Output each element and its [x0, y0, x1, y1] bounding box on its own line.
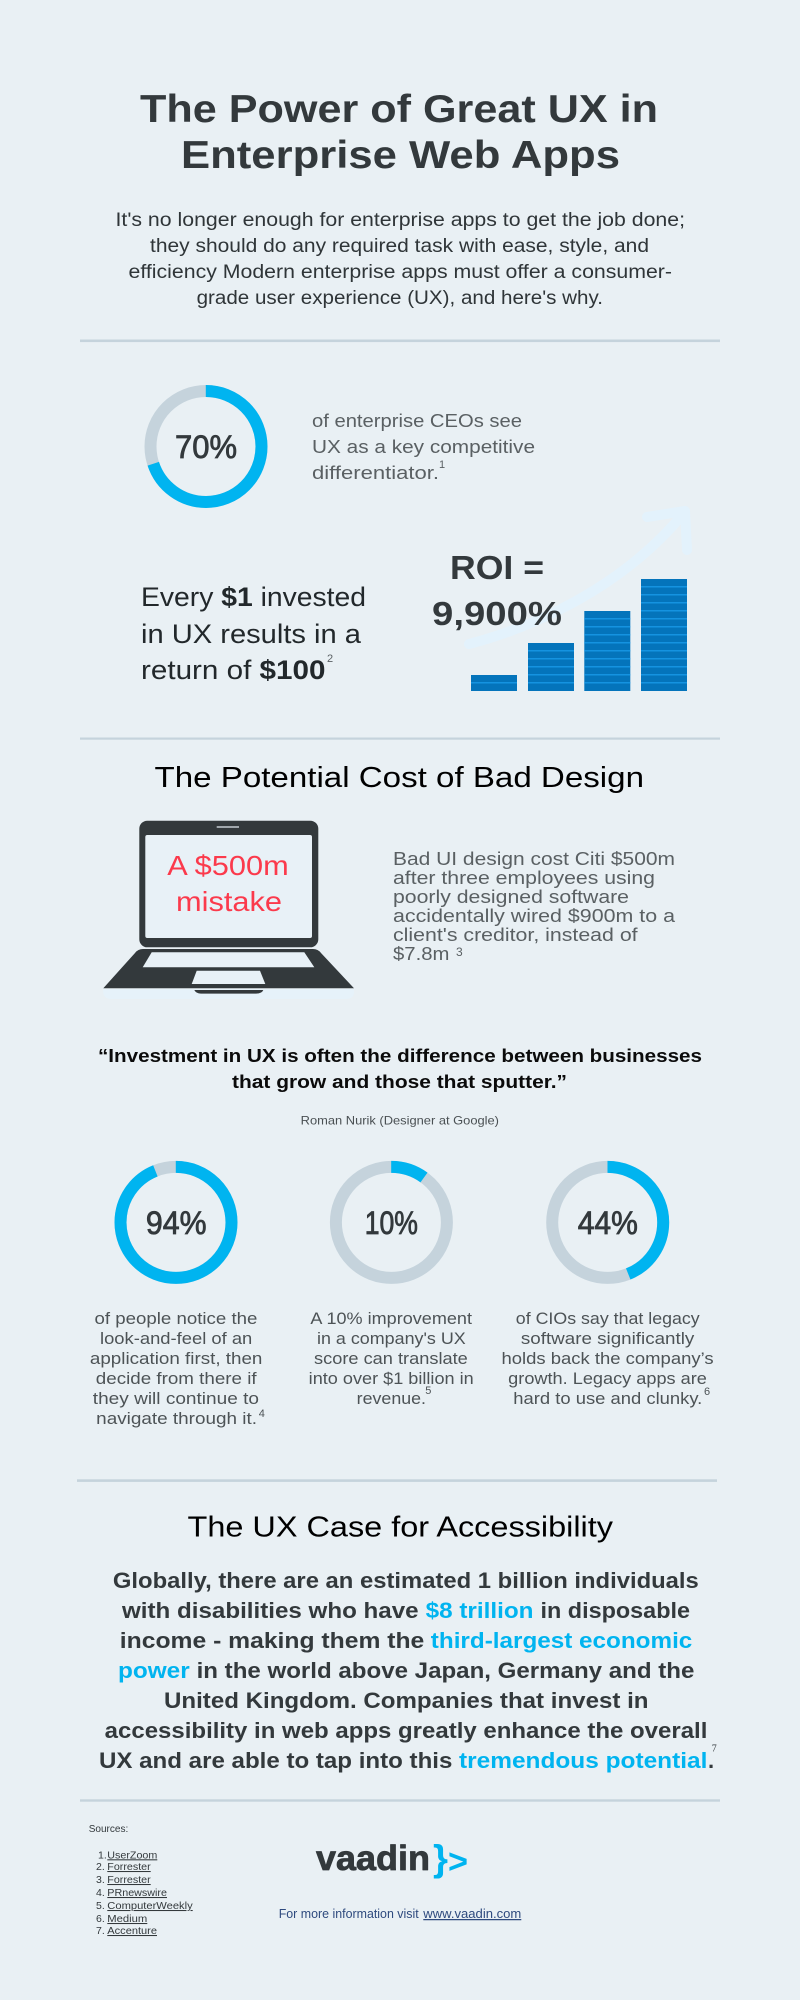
- caption: 94%: 4: [259, 1408, 265, 1420]
- quote: [98, 1046, 702, 1092]
- donut chart: 10%: [336, 1167, 447, 1278]
- intro paragraph: It's no longer enough for enterprise apps to get the job done;: [116, 210, 685, 231]
- caption: 10%: into over $1 billion in: [309, 1369, 474, 1388]
- text: Citi story: client's creditor, instead of: [393, 925, 639, 945]
- accessibility paragraph: income - making them the: [120, 1628, 424, 1653]
- caption: 10%: A 10% improvement: [310, 1309, 472, 1328]
- chart: rising bars with arrow: [469, 511, 687, 691]
- vaadin logo: [316, 1838, 468, 1881]
- quote: “Investment in UX is often the difference between businesses: [98, 1046, 702, 1066]
- caption: 44%: growth. Legacy apps are: [508, 1369, 707, 1388]
- text: return on investment: in UX results in a: [141, 619, 362, 649]
- caption: 94%: [90, 1309, 265, 1428]
- ROI label: [432, 549, 562, 632]
- caption: 10%: 5: [425, 1385, 431, 1397]
- sources list: Forrester: [107, 1861, 151, 1873]
- text: CEOs stat: [312, 411, 535, 483]
- donut chart: 44%: [552, 1167, 663, 1278]
- sources list: Accenture: [107, 1925, 157, 1937]
- caption: 94%: look-and-feel of an: [100, 1329, 252, 1348]
- caption: 10%: [309, 1309, 474, 1408]
- intro paragraph: grade user experience (UX), and here's why.: [197, 288, 603, 309]
- icon: laptop: [103, 821, 354, 999]
- intro paragraph: [116, 210, 685, 309]
- sources list: 6.: [96, 1913, 105, 1925]
- accessibility paragraph: in disposable: [540, 1598, 690, 1623]
- laptop screen text: [167, 850, 289, 917]
- text: Citi story: $7.8m: [393, 944, 449, 964]
- text: CEOs stat: UX as a key competitive: [312, 437, 535, 457]
- text: CEOs stat: of enterprise CEOs see: [312, 411, 522, 431]
- text: return on investment: 2: [327, 653, 333, 665]
- accessibility paragraph: accessibility in web apps greatly enhance the overall: [105, 1718, 707, 1743]
- caption: 94%: navigate through it.: [96, 1409, 257, 1428]
- sources list: 7.: [96, 1925, 105, 1937]
- quote: that grow and those that sputter.”: [232, 1072, 567, 1092]
- accessibility paragraph: [99, 1568, 717, 1773]
- ROI label: ROI =: [450, 549, 544, 586]
- donut chart: 10%: 10%: [365, 1205, 418, 1241]
- text: Citi story: 3: [456, 945, 463, 959]
- accessibility paragraph: tremendous potential: [459, 1748, 707, 1773]
- vaadin logo: >: [448, 1843, 468, 1881]
- accessibility paragraph: with disabilities who have: [121, 1598, 419, 1623]
- donut chart: 70%: [150, 391, 262, 502]
- caption: 44%: of CIOs say that legacy: [516, 1309, 700, 1328]
- sources list: 3.: [96, 1874, 105, 1886]
- caption: 44%: hard to use and clunky.: [513, 1389, 702, 1408]
- text: CEOs stat: 1: [439, 459, 445, 471]
- text: CEOs stat: differentiator.: [312, 463, 439, 483]
- footer link text: [279, 1907, 521, 1921]
- caption: 10%: score can translate: [314, 1349, 468, 1368]
- sources list: PRnewswire: [107, 1887, 167, 1899]
- sources list: Forrester: [107, 1874, 151, 1886]
- accessibility paragraph: power: [118, 1658, 190, 1683]
- text: Citi story: poorly designed software: [393, 887, 629, 907]
- laptop screen text: A $500m: [167, 850, 289, 881]
- caption: 94%: application first, then: [90, 1349, 262, 1368]
- caption: 10%: in a company's UX: [317, 1329, 466, 1348]
- caption: 44%: [502, 1309, 714, 1408]
- sources list: Sources:: [89, 1823, 128, 1835]
- text: Citi story: after three employees using: [393, 868, 655, 888]
- bars: [471, 579, 687, 691]
- sources list: 1.: [98, 1849, 107, 1861]
- caption: 44%: software significantly: [521, 1329, 695, 1348]
- heading: bad design: The Potential Cost of Bad Design: [154, 762, 644, 794]
- sources list: [89, 1823, 193, 1937]
- text: Citi story: [393, 849, 676, 964]
- sources list: ComputerWeekly: [107, 1900, 193, 1912]
- footer link text: For more information visit: [279, 1907, 419, 1921]
- accessibility paragraph: .: [708, 1748, 714, 1773]
- heading: accessibility: The UX Case for Accessibility: [188, 1512, 614, 1544]
- ROI label: 9,900%: [432, 595, 562, 632]
- vaadin logo: }: [433, 1838, 448, 1879]
- caption: 10%: revenue.: [357, 1389, 426, 1408]
- laptop screen text: mistake: [176, 886, 282, 917]
- caption: 94%: they will continue to: [93, 1389, 259, 1408]
- title: The Power of Great UX in: [140, 88, 658, 131]
- accessibility paragraph: UX and are able to tap into this: [99, 1748, 452, 1773]
- intro paragraph: efficiency Modern enterprise apps must offer a consumer-: [128, 262, 672, 283]
- quote attribution: Roman Nurik (Designer at Google): [301, 1114, 499, 1128]
- intro paragraph: they should do any required task with ease, style, and: [150, 236, 649, 257]
- text: return on investment: return of $100: [141, 655, 326, 685]
- donut chart: 94%: [120, 1167, 232, 1278]
- text: Citi story: Bad UI design cost Citi $500m: [393, 849, 675, 869]
- donut chart: 94%: 94%: [146, 1205, 206, 1241]
- accessibility paragraph: third-largest economic: [431, 1628, 692, 1653]
- caption: 94%: of people notice the: [94, 1309, 257, 1328]
- donut chart: 70%: 70%: [175, 429, 237, 465]
- accessibility paragraph: 7: [712, 1744, 717, 1755]
- accessibility paragraph: $8 trillion: [426, 1598, 534, 1623]
- caption: 44%: holds back the company’s: [502, 1349, 714, 1368]
- sources list: 5.: [96, 1900, 105, 1912]
- vaadin logo: vaadin: [316, 1839, 430, 1878]
- accessibility paragraph: United Kingdom. Companies that invest in: [164, 1688, 648, 1713]
- sources list: Medium: [107, 1913, 148, 1925]
- caption: 44%: 6: [704, 1386, 710, 1398]
- donut chart: 44%: 44%: [578, 1205, 638, 1241]
- accessibility paragraph: Globally, there are an estimated 1 billion individuals: [113, 1568, 699, 1593]
- text: Citi story: accidentally wired $900m to a: [393, 906, 676, 926]
- text: return on investment: [141, 582, 366, 685]
- caption: 94%: decide from there if: [96, 1369, 257, 1388]
- title: Enterprise Web Apps: [181, 134, 620, 177]
- sources list: UserZoom: [107, 1849, 158, 1861]
- sources list: 2.: [96, 1861, 105, 1873]
- accessibility paragraph: in the world above Japan, Germany and the: [197, 1658, 694, 1683]
- text: return on investment: Every $1 invested: [141, 582, 366, 612]
- arrow: [469, 511, 687, 644]
- title: [140, 88, 658, 177]
- sources list: 4.: [96, 1887, 105, 1899]
- footer link text: www.vaadin.com: [422, 1907, 521, 1921]
